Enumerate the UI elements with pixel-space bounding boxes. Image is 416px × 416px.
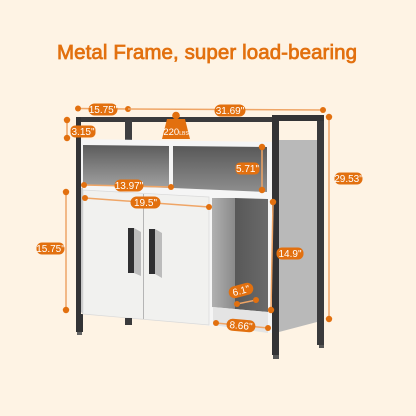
dimension: 31.69 total width: 31.69"	[216, 106, 245, 117]
dimension: 3.15	[64, 117, 96, 141]
cabinet illustration	[76, 115, 324, 359]
center foot	[125, 318, 132, 325]
inner rear post	[125, 120, 132, 142]
left handle shadow	[134, 228, 141, 276]
double doors	[83, 190, 209, 325]
right front post	[272, 115, 279, 355]
left handle	[128, 228, 134, 273]
dimension: 14.9	[268, 199, 304, 313]
dimension: 8.66	[213, 318, 271, 333]
dimension: 13.97: 13.97"	[115, 181, 144, 192]
cabinet body	[81, 139, 272, 333]
dimension: 29.53	[326, 114, 363, 322]
open compartment left wall	[212, 198, 235, 309]
dimension: 15.75 door height: 15.75"	[36, 244, 65, 255]
dimension: 19.5	[82, 195, 212, 210]
right handle shadow	[155, 229, 162, 278]
right open cube	[173, 146, 267, 192]
icon: weight 220 lbs: 220LBS	[163, 127, 189, 138]
open compartment back wall	[235, 198, 268, 312]
dimension: 13.97	[81, 180, 174, 192]
left front post	[76, 117, 81, 315]
dimension: 8.66: 8.66"	[229, 320, 253, 333]
title: Metal Frame, super load-bearing	[57, 41, 357, 64]
dimension: 14.9: 14.9"	[278, 249, 302, 260]
dimension: 31.69 total width	[128, 104, 326, 117]
dimension: 3.15: 3.15"	[71, 127, 95, 138]
dimension: 6.1: 6.1"	[231, 284, 252, 299]
right handle	[149, 229, 155, 274]
left open cube	[83, 145, 169, 188]
dimension: 6.1	[227, 281, 259, 307]
dimension: 15.75 top width: 15.75"	[89, 105, 118, 116]
dimension: 5.71	[236, 144, 265, 193]
back right leg	[317, 115, 324, 345]
dimension: 15.75 door height	[36, 189, 69, 313]
icon: weight 220 lbs	[162, 112, 190, 139]
compartment floor	[213, 307, 268, 333]
left edge shade	[81, 188, 83, 314]
dimension: 19.5: 19.5"	[134, 198, 157, 209]
door seam	[142, 194, 144, 319]
dimension: 29.53: 29.53"	[334, 174, 363, 185]
side panel	[279, 140, 317, 332]
dimension: 5.71: 5.71"	[236, 164, 259, 175]
dimension: 15.75 top width	[75, 104, 131, 116]
top frame	[76, 117, 272, 140]
